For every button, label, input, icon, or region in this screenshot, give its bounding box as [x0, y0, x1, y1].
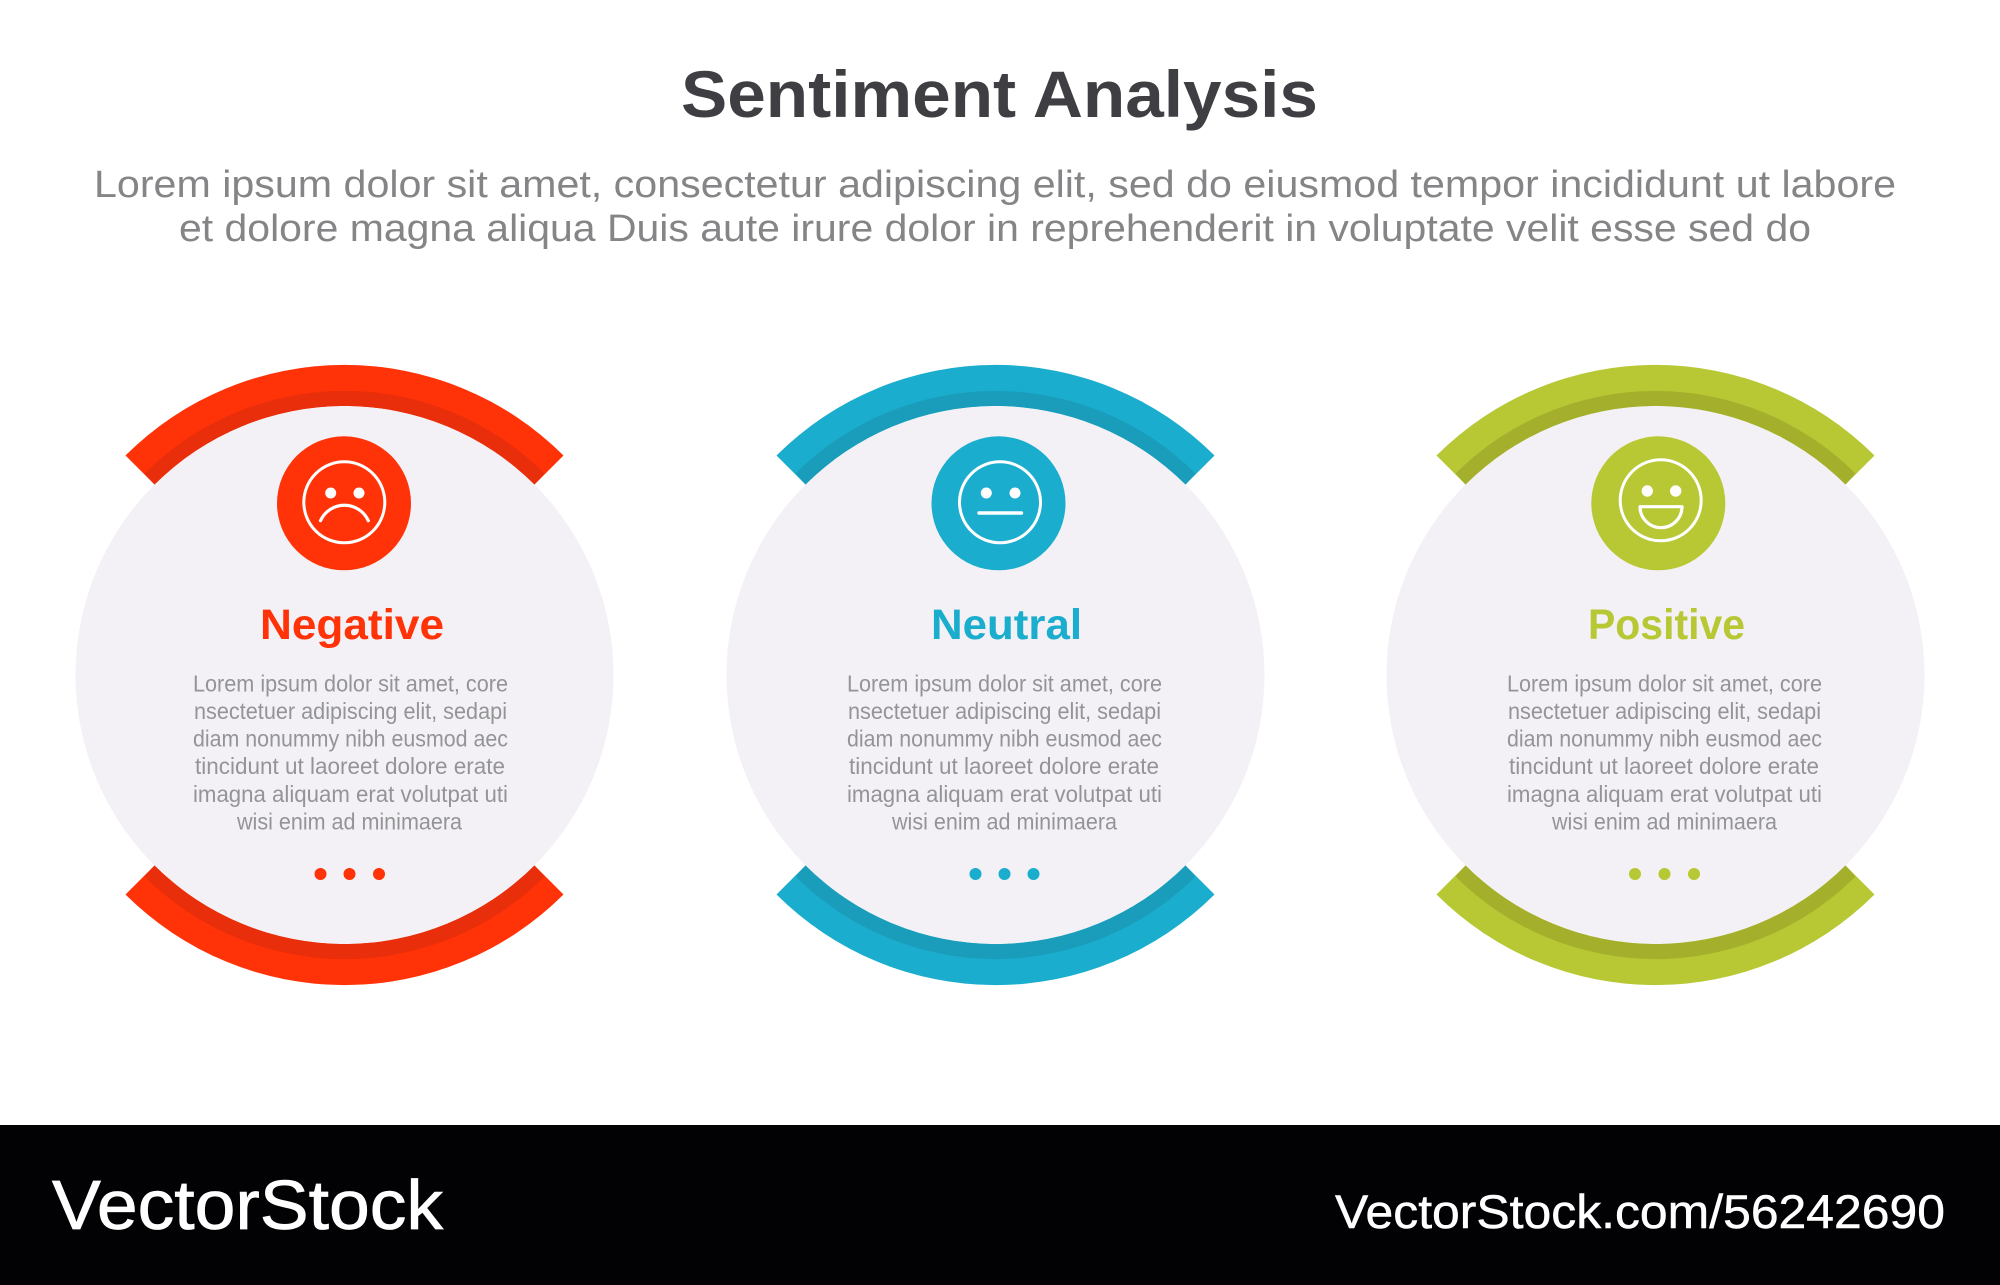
body text: positive: wisi enim ad minimaera [1551, 808, 1777, 834]
circle background: positive [1386, 406, 1924, 944]
body text: negative: nsectetuer adipiscing elit, sedapi [194, 698, 507, 724]
body text: negative [193, 670, 508, 834]
body text: neutral: tincidunt ut laoreet dolore erate [849, 753, 1159, 779]
body text: neutral: Lorem ipsum dolor sit amet, core [847, 670, 1162, 696]
subtitle text: Lorem ipsum dolor sit amet, consectetur adipiscing elit, sed do eiusmod tempor incididunt ut labore [94, 164, 1896, 206]
body text: negative: diam nonummy nibh eusmod aec [193, 726, 508, 752]
icon: neutral face [932, 436, 1066, 570]
panel: negative [76, 365, 614, 985]
top arc: positive [1436, 365, 1874, 484]
circle background: negative [76, 406, 614, 944]
body text: neutral: diam nonummy nibh eusmod aec [847, 726, 1162, 752]
body text: negative: imagna aliquam erat volutpat uti [193, 781, 508, 807]
top arc: neutral [776, 365, 1214, 484]
subtitle text: et dolore magna aliqua Duis aute irure dolor in reprehenderit in voluptate velit esse sed do [179, 208, 1811, 250]
dots: negative [314, 868, 385, 880]
heading: neutral: Neutral [931, 601, 1082, 649]
bottom arc: neutral [776, 866, 1214, 985]
subtitle text [94, 164, 1896, 250]
icon: sad face [277, 436, 411, 570]
body text: positive: nsectetuer adipiscing elit, sedapi [1508, 698, 1821, 724]
footer bar [0, 1125, 2000, 1285]
top arc: negative [126, 365, 564, 484]
footer url text: VectorStock.com/56242690 [1335, 1185, 1945, 1238]
heading: positive: Positive [1588, 601, 1745, 649]
body text: neutral: imagna aliquam erat volutpat uti [847, 781, 1162, 807]
body text: neutral: wisi enim ad minimaera [891, 808, 1117, 834]
circle background: neutral [726, 406, 1264, 944]
panel: neutral [726, 365, 1264, 985]
heading: negative: Negative [260, 601, 444, 649]
body text: neutral [847, 670, 1162, 834]
body text: negative: Lorem ipsum dolor sit amet, core [193, 670, 508, 696]
dots: positive [1629, 868, 1700, 880]
footer logo text: VectorStock [52, 1166, 444, 1244]
panel: positive [1386, 365, 1924, 985]
bottom arc: negative [126, 866, 564, 985]
body text: positive: Lorem ipsum dolor sit amet, core [1507, 670, 1822, 696]
dots: neutral [970, 868, 1040, 880]
body text: positive [1507, 670, 1822, 834]
body text: negative: wisi enim ad minimaera [236, 808, 462, 834]
body text: positive: imagna aliquam erat volutpat uti [1507, 781, 1822, 807]
title: Sentiment Analysis [681, 57, 1318, 131]
body text: positive: diam nonummy nibh eusmod aec [1507, 726, 1822, 752]
body text: neutral: nsectetuer adipiscing elit, sedapi [848, 698, 1161, 724]
bottom arc: positive [1436, 866, 1874, 985]
body text: negative: tincidunt ut laoreet dolore erate [195, 753, 505, 779]
body text: positive: tincidunt ut laoreet dolore erate [1509, 753, 1819, 779]
icon: happy face [1591, 436, 1725, 570]
